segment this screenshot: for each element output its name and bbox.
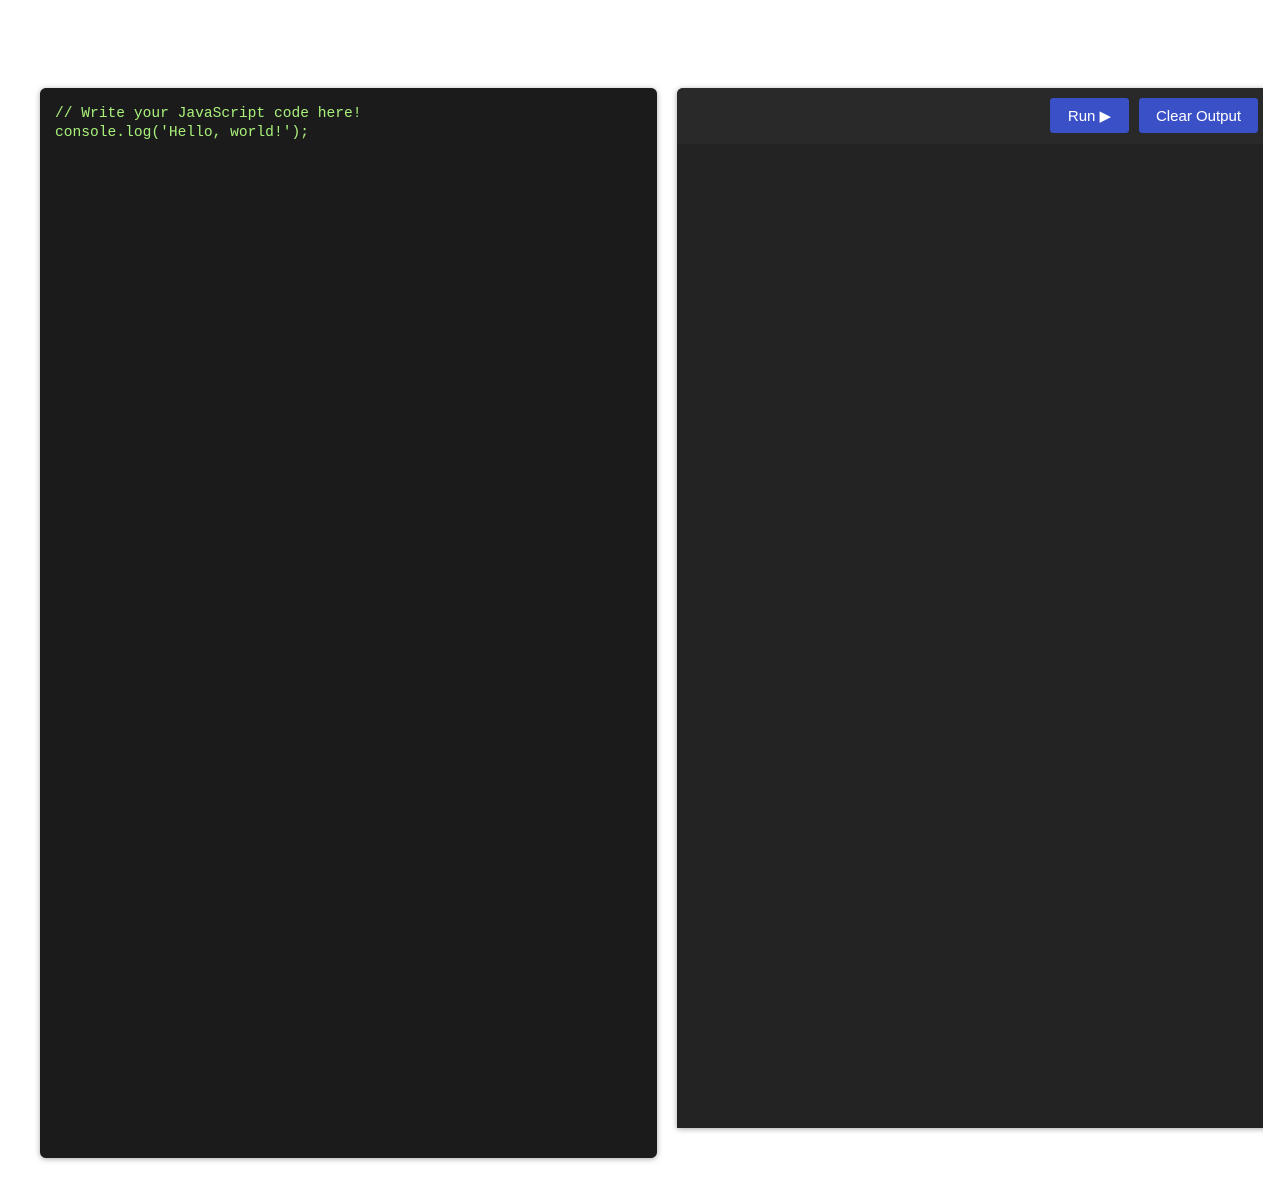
- panel: output: [677, 88, 1263, 1128]
- button: run: [1050, 98, 1129, 133]
- code text: // Write your JavaScript code here! console.log('Hello, world!');: [55, 106, 362, 141]
- button: run: Run ▶: [1068, 108, 1111, 125]
- button: clear output: Clear Output: [1156, 108, 1241, 125]
- panel: code editor: [40, 88, 657, 1158]
- button: clear output: [1139, 98, 1258, 133]
- toolbar: [677, 88, 1263, 144]
